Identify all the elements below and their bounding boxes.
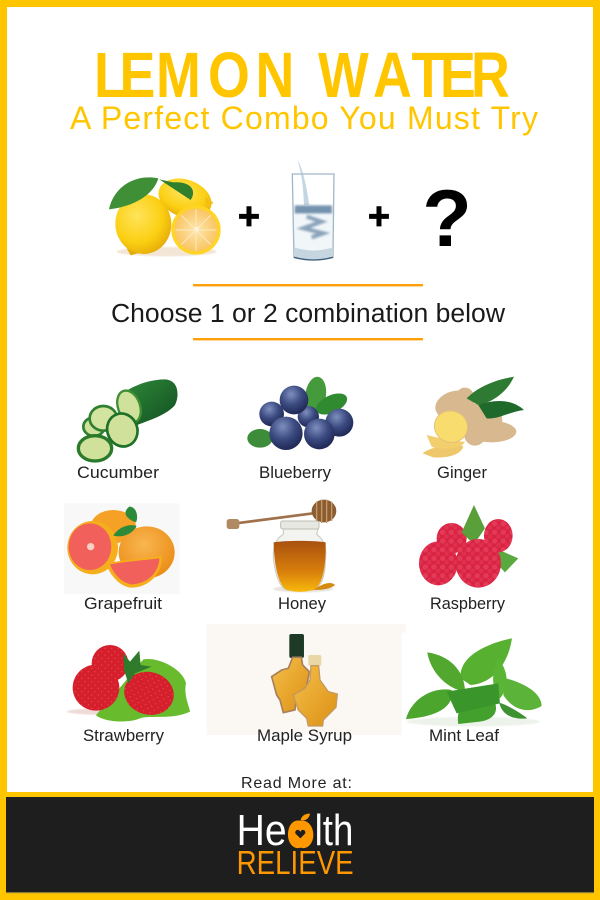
equation: lemon + water + ? — [109, 159, 472, 264]
item: maple syrup — [207, 624, 406, 745]
item: blueberry: Blueberry — [259, 464, 332, 482]
icon: apple — [288, 814, 313, 848]
item: cucumber: Cucumber — [77, 464, 160, 482]
item: cucumber — [77, 379, 178, 482]
footer band — [0, 792, 600, 900]
item: maple syrup: Maple Syrup — [257, 727, 352, 745]
item: honey: Honey — [278, 595, 327, 613]
logo: Health Relieve — [237, 807, 354, 882]
item: raspberry: Raspberry — [430, 595, 506, 613]
item: ginger — [423, 377, 524, 482]
title: LEMON WATER — [94, 39, 510, 111]
logo: Health Relieve: He — [237, 807, 287, 855]
divider line — [193, 338, 423, 340]
item: strawberry — [67, 645, 190, 745]
item: grapefruit — [64, 503, 179, 613]
instruction text: Choose 1 or 2 combination below — [111, 300, 506, 328]
item: mint leaf: Mint Leaf — [429, 727, 499, 745]
item: honey — [227, 500, 336, 613]
icon: glass of water — [292, 159, 334, 260]
read more text: Read More at: — [241, 775, 352, 792]
item: blueberry — [247, 375, 353, 482]
plus sign: + — [368, 196, 390, 238]
item: grapefruit: Grapefruit — [84, 595, 162, 613]
item: strawberry: Strawberry — [83, 727, 165, 745]
item: ginger: Ginger — [437, 464, 488, 482]
plus sign: + — [238, 196, 260, 238]
question mark: ? — [422, 174, 472, 264]
icon: lemons — [109, 171, 221, 256]
logo: Health Relieve: lth — [315, 807, 353, 855]
logo: Health Relieve: RELIEVE — [237, 845, 354, 882]
item: mint leaf — [406, 638, 542, 745]
divider line — [193, 284, 423, 286]
item: raspberry — [419, 505, 518, 613]
subtitle: A Perfect Combo You Must Try — [70, 100, 538, 136]
